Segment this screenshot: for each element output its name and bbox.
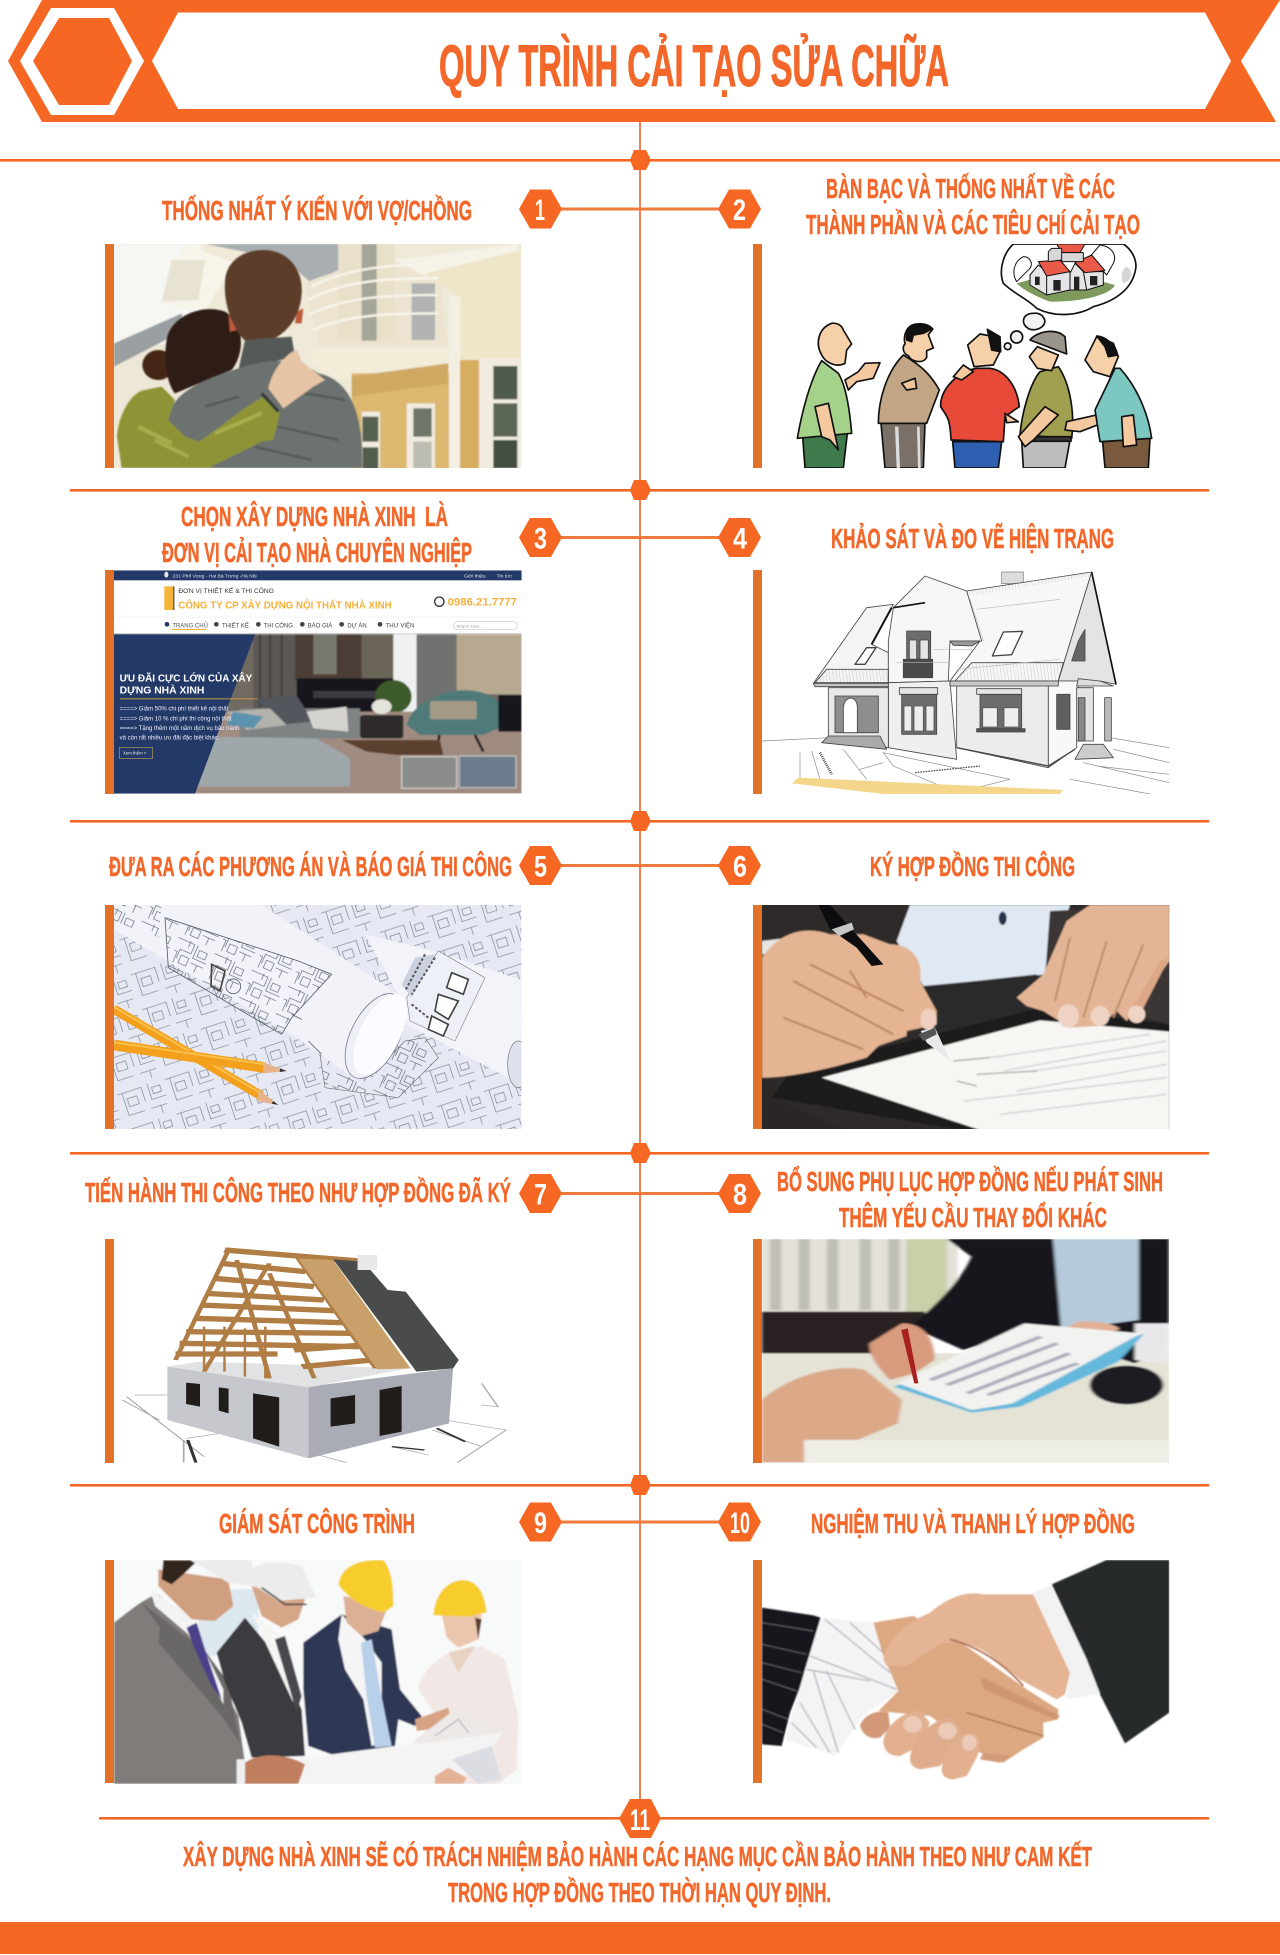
heading 7: TIẾN HÀNH THI CÔNG THEO NHƯ HỢP ĐỒNG ĐÃ KÝ bbox=[85, 1176, 511, 1208]
website screenshot: BÁO GIÁ bbox=[308, 623, 332, 630]
heading 8 bbox=[777, 1166, 1163, 1233]
panel: step 1 bbox=[105, 190, 562, 473]
website screenshot: THƯ VIỆN bbox=[386, 622, 414, 630]
badge 2 bbox=[718, 190, 761, 228]
illustration: five men discussing a house bbox=[797, 244, 1152, 468]
man 1 bbox=[797, 323, 880, 468]
heading 3: ĐƠN VỊ CẢI TẠO NHÀ CHUYÊN NGHIỆP bbox=[162, 536, 472, 568]
photo: engineers reading plans bbox=[105, 1556, 525, 1789]
heading 9: GIÁM SÁT CÔNG TRÌNH bbox=[219, 1507, 415, 1539]
badge 6: 6 bbox=[733, 850, 747, 884]
accent bar 10 bbox=[753, 1560, 762, 1783]
heading 1: THỐNG NHẤT Ý KIẾN VỚI VỢ/CHỒNG bbox=[162, 194, 472, 226]
badge 9 bbox=[519, 1502, 562, 1542]
badge 11 bbox=[619, 1799, 661, 1838]
connector 3-4 bbox=[560, 536, 720, 539]
panel: step 6 bbox=[718, 846, 1170, 1134]
panel: step 7 bbox=[85, 1174, 562, 1463]
badge 1: 1 bbox=[535, 194, 545, 227]
photo: couple looking at house bbox=[105, 240, 525, 473]
divider 5 bbox=[70, 1475, 1209, 1495]
timeline spine bbox=[639, 122, 641, 1802]
accent bar 5 bbox=[105, 905, 114, 1129]
divider 1 bbox=[0, 150, 1280, 170]
website screenshot: ====> Giảm 50% chi phí thiết kế nội thất bbox=[120, 706, 229, 712]
website screenshot: TRANG CHỦ bbox=[172, 623, 208, 630]
badge 10 bbox=[718, 1502, 761, 1542]
badge 11: 11 bbox=[630, 1804, 650, 1837]
illustration: house under roof construction bbox=[122, 1250, 506, 1463]
website screenshot: Tin tức bbox=[497, 573, 513, 579]
connector 9-10 bbox=[560, 1520, 720, 1524]
panel: step 8 bbox=[718, 1166, 1171, 1463]
website screenshot: CÔNG TY CP XÂY DỰNG NỘI THẤT NHÀ XINH bbox=[178, 599, 392, 612]
man 3 bbox=[941, 329, 1019, 468]
website screenshot: Nhập từ khóa... bbox=[457, 624, 482, 628]
first blueprint roll bbox=[114, 905, 418, 1088]
roof trusses bbox=[176, 1250, 376, 1378]
badge 5: 5 bbox=[534, 850, 547, 884]
website screenshot: THI CÔNG bbox=[264, 623, 293, 630]
heading 5: ĐƯA RA CÁC PHƯƠNG ÁN VÀ BÁO GIÁ THI CÔNG bbox=[109, 850, 512, 882]
photo: hand signing contract bbox=[750, 901, 1170, 1134]
website screenshot: THIẾT KẾ bbox=[222, 623, 249, 630]
website screenshot: 0986.21.7777 bbox=[448, 597, 517, 609]
pencils bbox=[114, 1007, 287, 1105]
website screenshot: ĐƠN VỊ THIẾT KẾ & THI CÔNG bbox=[178, 585, 274, 595]
accent bar 7 bbox=[105, 1239, 114, 1463]
website screenshot: và còn rất nhiều ưu đãi đặc biệt khác bbox=[120, 736, 218, 742]
badge 3 bbox=[519, 518, 562, 557]
website screenshot bbox=[114, 570, 522, 794]
photo: rolled blueprints and pencils bbox=[105, 901, 529, 1134]
heading 2 bbox=[806, 172, 1140, 240]
website screenshot: ƯU ĐÃI CỰC LỚN CỦA XÂY bbox=[120, 672, 252, 685]
connector 1-2 bbox=[560, 208, 720, 210]
accent bar 9 bbox=[105, 1560, 114, 1783]
divider 4 bbox=[70, 1143, 1209, 1163]
panel: step 2 bbox=[718, 172, 1152, 468]
footer band bbox=[0, 1922, 1280, 1954]
panel: step 3 bbox=[105, 501, 562, 794]
connector 7-8 bbox=[560, 1192, 720, 1195]
accent bar 1 bbox=[105, 244, 114, 468]
heading 8: THÊM YẾU CẦU THAY ĐỔI KHÁC bbox=[839, 1202, 1107, 1233]
illustration: house sketch on plans bbox=[762, 572, 1169, 795]
second blueprint roll bbox=[365, 934, 529, 1088]
heading 3 bbox=[162, 501, 472, 568]
accent bar 2 bbox=[753, 244, 762, 468]
divider 2 bbox=[70, 480, 1209, 500]
website screenshot: ====> Giảm 10 % chi phí thi công nội thất bbox=[120, 716, 232, 722]
website screenshot: Xem thêm > bbox=[123, 751, 147, 756]
title banner bbox=[8, 0, 1280, 122]
connector 5-6 bbox=[560, 864, 720, 867]
badge 7: 7 bbox=[534, 1178, 547, 1212]
badge 4 bbox=[718, 518, 761, 557]
badge 9: 9 bbox=[534, 1507, 547, 1540]
badge 6 bbox=[718, 846, 761, 885]
accent bar 8 bbox=[753, 1239, 762, 1463]
accent bar 6 bbox=[753, 905, 762, 1129]
heading 6: KÝ HỢP ĐỒNG THI CÔNG bbox=[870, 850, 1075, 882]
panel: step 5 bbox=[105, 846, 562, 1134]
heading 3: CHỌN XÂY DỰNG NHÀ XINH LÀ bbox=[181, 501, 448, 532]
accent bar 4 bbox=[753, 570, 762, 794]
badge 3: 3 bbox=[534, 522, 547, 556]
badge 7 bbox=[519, 1174, 562, 1213]
badge 1 bbox=[519, 190, 562, 228]
badge 8 bbox=[718, 1174, 761, 1213]
man 5 bbox=[1065, 336, 1152, 468]
panel: step 10 bbox=[718, 1502, 1169, 1783]
website screenshot: 231 Phố Vọng - Hai Bà Trưng -Hà Nội bbox=[173, 573, 257, 579]
panel: step 4 bbox=[718, 518, 1169, 795]
website screenshot: ====> Tặng thêm một năm dịch vụ bảo hành bbox=[120, 726, 239, 732]
photo: handing over a contract bbox=[762, 1239, 1171, 1463]
website screenshot: Giới thiệu bbox=[464, 573, 486, 579]
accent bar 3 bbox=[105, 570, 114, 794]
divider 3 bbox=[70, 811, 1209, 831]
badge 4: 4 bbox=[733, 522, 747, 556]
man 4 bbox=[1018, 331, 1073, 468]
badge 2: 2 bbox=[733, 194, 746, 227]
website screenshot: DỰ ÁN bbox=[347, 623, 367, 630]
panel: step 9 bbox=[105, 1502, 562, 1789]
photo: business handshake bbox=[762, 1560, 1169, 1779]
closing statement bbox=[183, 1840, 1092, 1908]
closing statement: TRONG HỢP ĐỒNG THEO THỜI HẠN QUY ĐỊNH. bbox=[448, 1877, 831, 1908]
divider 6 bbox=[99, 1817, 1209, 1820]
website screenshot: DỰNG NHÀ XINH bbox=[120, 684, 204, 697]
badge 8: 8 bbox=[733, 1178, 747, 1212]
man 2 bbox=[878, 324, 939, 468]
badge 10: 10 bbox=[730, 1507, 750, 1540]
badge 5 bbox=[519, 846, 562, 885]
thought bubble bbox=[1001, 244, 1136, 350]
